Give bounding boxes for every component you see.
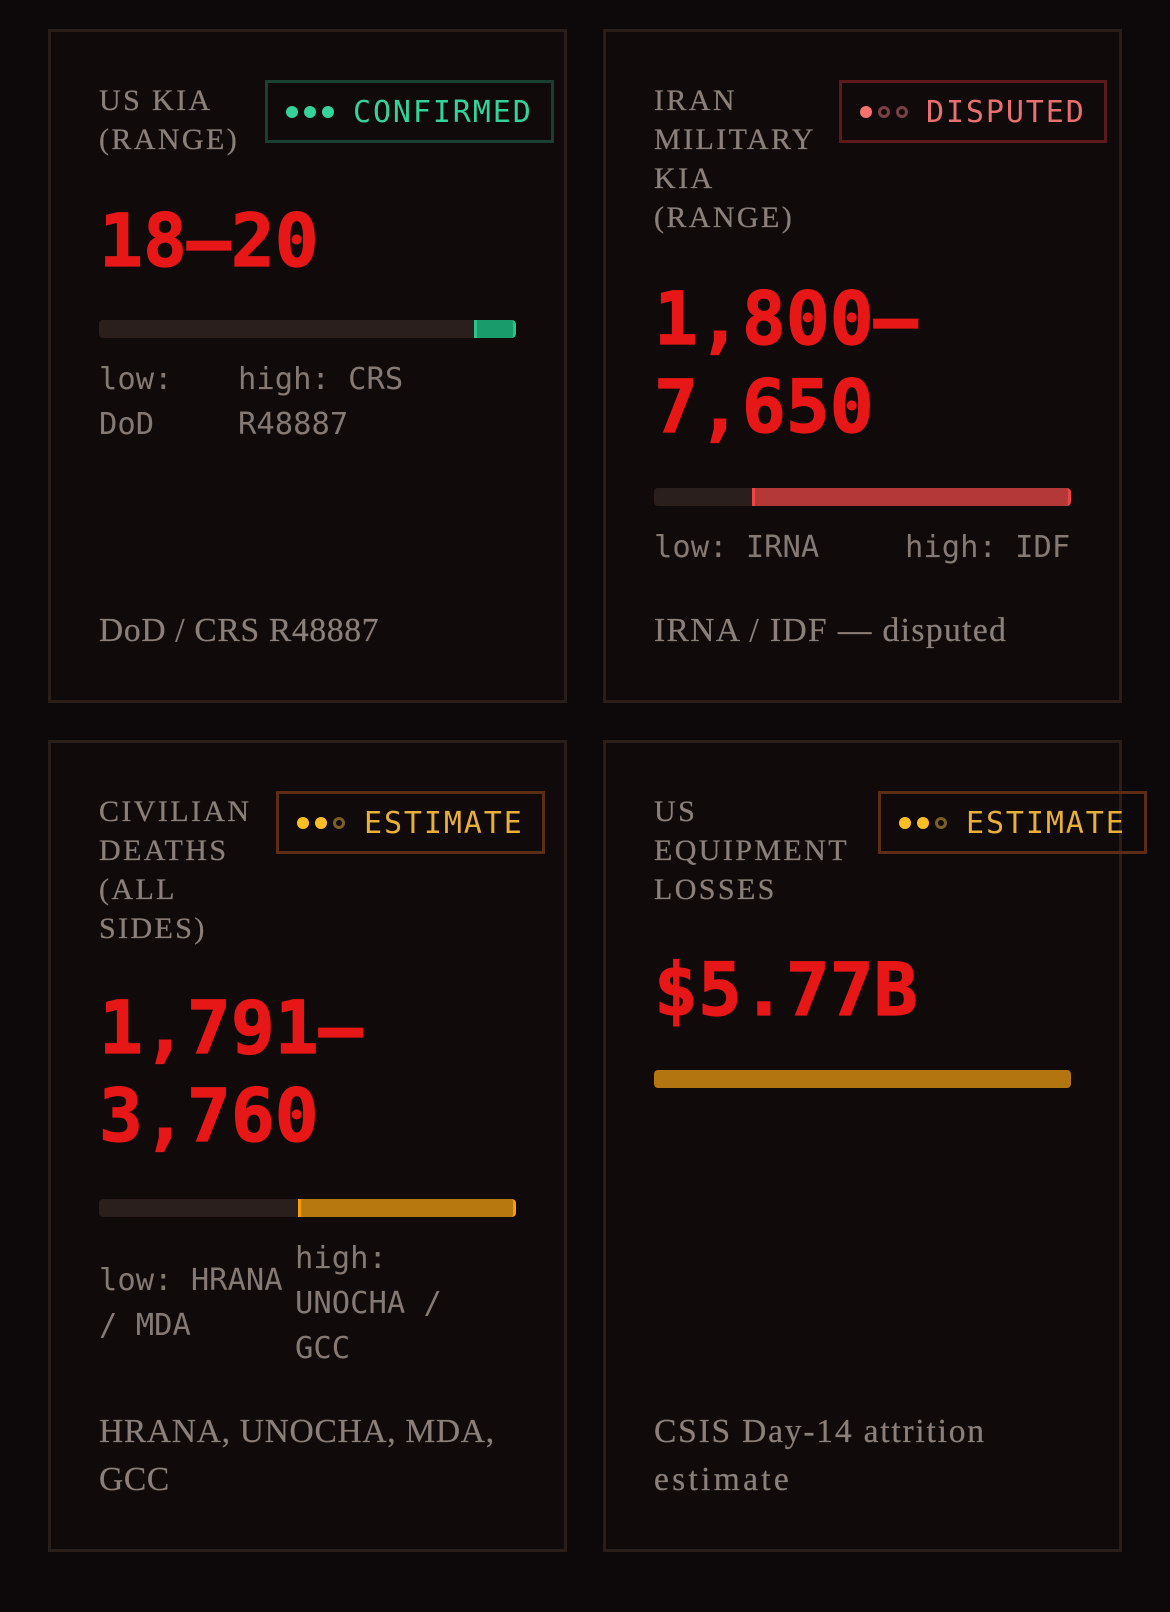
source note: estimate — [654, 1460, 792, 1498]
value: 1,791–3,760: 3,760 — [99, 1074, 319, 1158]
label: civilian deaths: CIVILIAN — [99, 795, 252, 828]
badge: estimate: ESTIMATE — [966, 806, 1126, 841]
label: US KIA — [99, 84, 239, 156]
value: 1,800–7,650: 7,650 — [654, 364, 874, 450]
range high source: UNOCHA / — [295, 1286, 442, 1321]
badge: estimate: ESTIMATE — [364, 806, 524, 841]
range low source — [99, 1263, 283, 1343]
value: 1,791–3,760: 1,791— — [99, 986, 363, 1071]
label: civilian deaths: (ALL — [99, 873, 177, 906]
label: Iran military KIA: IRAN — [654, 84, 737, 117]
value: 1,800–7,650: 1,800— — [654, 277, 918, 362]
source note: GCC — [99, 1460, 170, 1498]
badge: estimate — [878, 791, 1147, 854]
source note: IRNA / IDF — disputed — [654, 612, 1007, 649]
label: US equipment losses: US — [654, 795, 697, 828]
label: Iran military KIA: MILITARY — [654, 123, 816, 156]
range low source: low: IRNA — [654, 530, 819, 565]
source note: DoD / CRS R48887 — [99, 612, 379, 649]
label: Iran military KIA: KIA — [654, 162, 715, 195]
label: Iran military KIA: (RANGE) — [654, 201, 794, 234]
label: civilian deaths: DEATHS — [99, 834, 228, 867]
range low source — [99, 362, 172, 442]
range low source: low: — [99, 362, 172, 397]
panel: civilian deaths — [48, 740, 567, 1552]
range high source: R48887 — [238, 407, 348, 442]
panel: US equipment losses — [603, 740, 1122, 1552]
source note: HRANA, UNOCHA, MDA, — [99, 1413, 495, 1450]
range bar: US KIA — [99, 320, 516, 338]
range high source — [295, 1241, 442, 1366]
value: 1,791–3,760 — [99, 986, 364, 1158]
range low source: / MDA — [99, 1308, 191, 1343]
label: US equipment losses: EQUIPMENT — [654, 834, 849, 867]
badge: estimate — [276, 791, 545, 854]
label: Iran military KIA — [654, 84, 816, 234]
range bar: Iran military KIA — [654, 488, 1071, 506]
range low source: low: HRANA — [99, 1263, 283, 1298]
source note: CSIS Day-14 attrition — [654, 1413, 986, 1450]
label: civilian deaths: SIDES) — [99, 912, 207, 945]
badge: disputed — [839, 80, 1107, 143]
label: US KIA: US KIA — [99, 84, 213, 117]
value: 18–20: 18—20 — [99, 199, 319, 284]
range high source: high: IDF — [905, 530, 1070, 565]
value: 1,800–7,650 — [654, 277, 918, 450]
source note — [654, 1413, 986, 1498]
label: civilian deaths — [99, 795, 252, 945]
range high source: high: CRS — [238, 362, 403, 397]
badge: confirmed — [265, 80, 554, 143]
label: US KIA: (RANGE) — [99, 123, 239, 156]
range bar: equipment losses — [654, 1070, 1071, 1088]
value: $5.77B: $5.77B — [654, 948, 918, 1033]
panel: US KIA range — [48, 29, 567, 703]
range bar: civilian deaths — [99, 1199, 516, 1217]
range high source — [238, 362, 403, 442]
range high source: GCC — [295, 1331, 350, 1366]
badge: disputed: DISPUTED — [926, 95, 1086, 130]
badge: confirmed: CONFIRMED — [353, 95, 533, 130]
range low source: DoD — [99, 407, 154, 442]
source note — [99, 1413, 495, 1498]
panel: Iran military KIA range — [603, 29, 1122, 703]
label: US equipment losses: LOSSES — [654, 873, 777, 906]
range high source: high: — [295, 1241, 387, 1276]
label: US equipment losses — [654, 795, 849, 906]
